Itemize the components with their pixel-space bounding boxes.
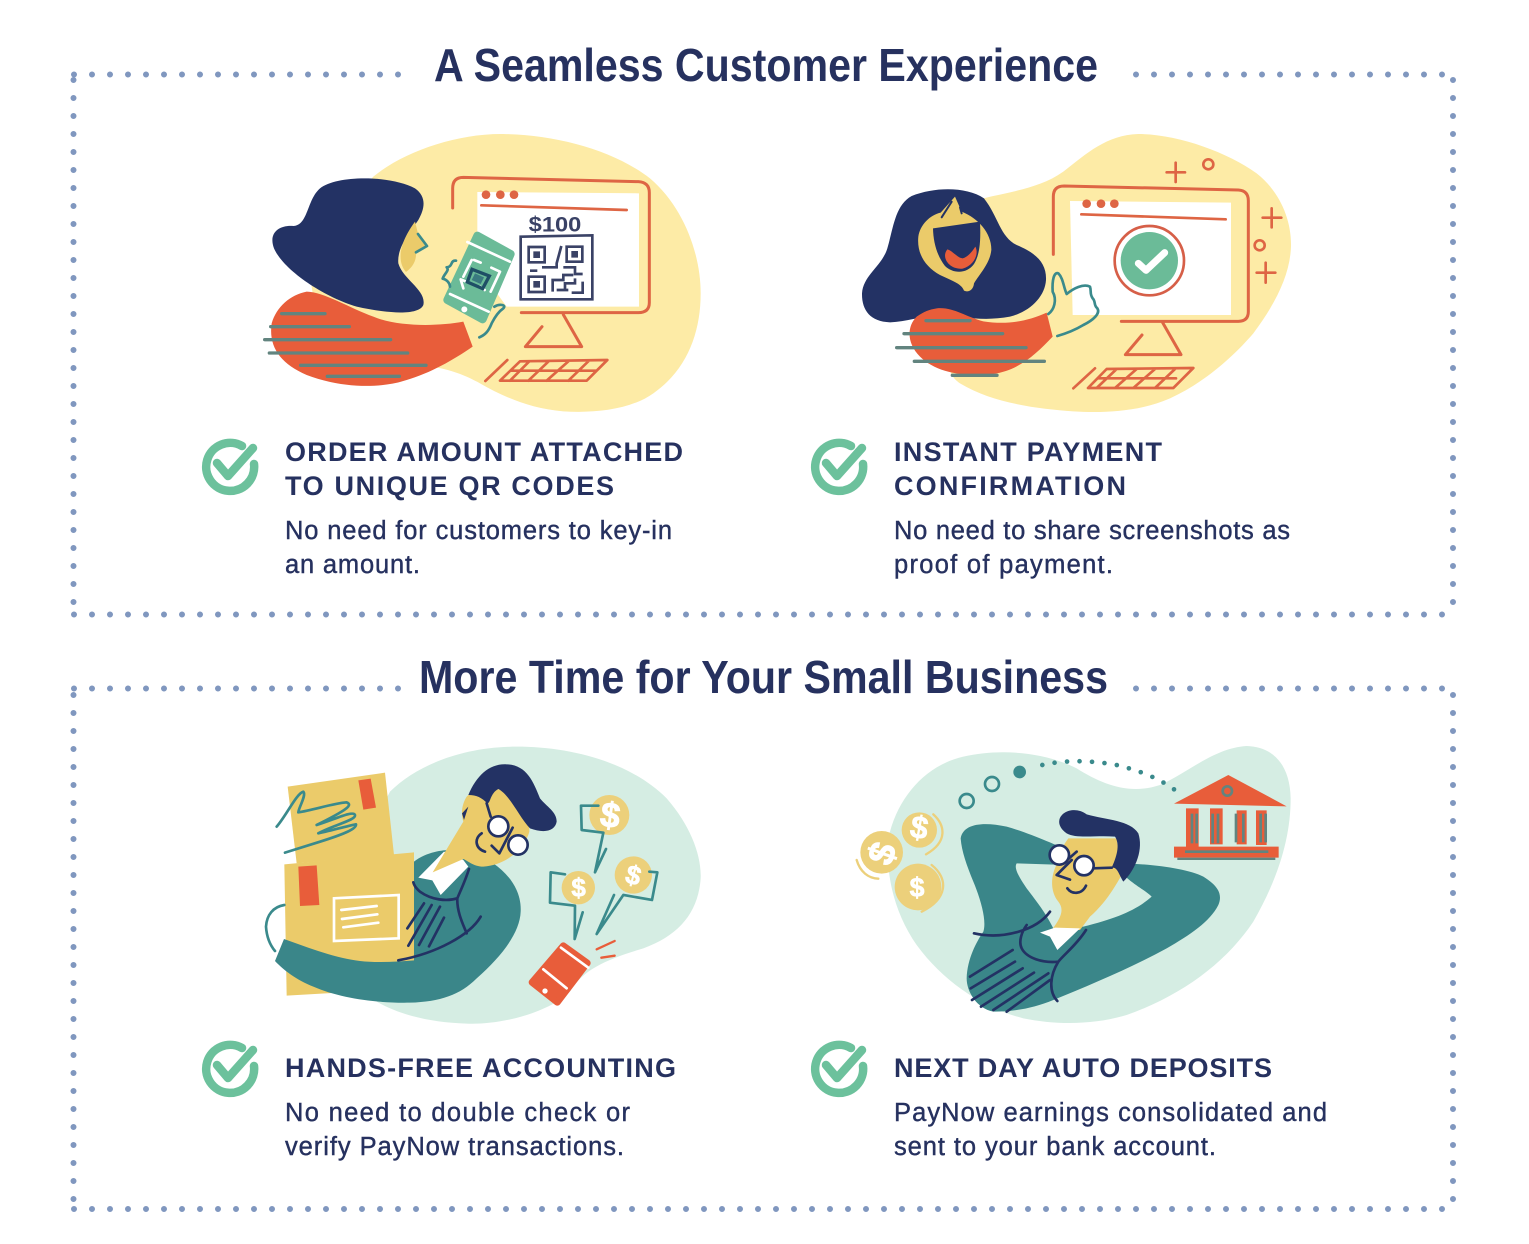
icon: check 3 bbox=[206, 1045, 254, 1093]
text: hands-free accounting: HANDS-FREE ACCOUNTING bbox=[285, 1053, 676, 1083]
coins: $ bbox=[908, 808, 932, 847]
monitor frame bbox=[453, 177, 649, 347]
browser dots bbox=[482, 190, 518, 199]
keyboard bbox=[485, 360, 607, 381]
text: hands-free accounting: verify PayNow transactions. bbox=[285, 1133, 624, 1161]
text: hands-free accounting bbox=[285, 1053, 676, 1161]
stripes bbox=[897, 321, 1044, 375]
text: instant payment: proof of payment. bbox=[894, 551, 1113, 579]
illustration: man carrying boxes: $ bbox=[598, 795, 623, 836]
text: order amount: an amount. bbox=[285, 551, 420, 579]
thumbs up hand bbox=[1048, 273, 1098, 336]
shirt lines bbox=[398, 869, 481, 960]
title: a seamless customer experience: A Seamless Customer Experience bbox=[434, 39, 1098, 91]
neck and face bbox=[1052, 838, 1122, 930]
hair bbox=[462, 764, 557, 831]
hand bbox=[443, 261, 504, 337]
illustration: woman confirming payment bbox=[862, 134, 1291, 412]
collar bbox=[418, 852, 468, 895]
head bbox=[918, 197, 991, 291]
phone QR bbox=[467, 269, 489, 289]
browser dots bbox=[1082, 199, 1119, 208]
keyboard bbox=[1073, 368, 1193, 388]
text: next day auto deposits: sent to your bank account. bbox=[894, 1133, 1216, 1161]
text: instant payment bbox=[894, 437, 1290, 579]
coins bbox=[589, 795, 629, 835]
illustration: woman scanning QR code bbox=[265, 134, 701, 412]
illustration: man carrying boxes: $ bbox=[571, 873, 586, 903]
body lines bbox=[970, 912, 1086, 1012]
sparkles bbox=[1167, 159, 1281, 283]
icon: check 4 bbox=[815, 1045, 863, 1093]
torso and arm bbox=[275, 850, 521, 1003]
phone bbox=[447, 236, 511, 319]
hair bbox=[272, 178, 424, 312]
mint blob bbox=[888, 746, 1291, 1023]
label bbox=[334, 895, 399, 941]
thought bubbles bbox=[960, 777, 999, 808]
glasses bbox=[488, 816, 528, 855]
collar bbox=[1040, 928, 1080, 950]
upper box bbox=[288, 773, 394, 863]
mint blob bbox=[350, 747, 701, 1024]
illustration: man carrying boxes: $ bbox=[622, 859, 645, 892]
panel: a seamless customer experience border bbox=[74, 74, 1453, 614]
monitor frame bbox=[1053, 186, 1248, 355]
arm and torso bbox=[961, 824, 1220, 1012]
hair bbox=[862, 189, 1046, 322]
QR code bbox=[521, 235, 592, 299]
bank bbox=[1174, 775, 1287, 860]
text: order amount: ORDER AMOUNT ATTACHED bbox=[285, 437, 683, 467]
text: instant payment: No need to share screenshots as bbox=[894, 517, 1290, 545]
text: order amount: No need for customers to key-in bbox=[285, 517, 672, 545]
text: hands-free accounting: No need to double check or bbox=[285, 1099, 630, 1127]
monitor screen bbox=[477, 192, 639, 307]
text: instant payment: INSTANT PAYMENT bbox=[894, 437, 1162, 467]
text: order amount bbox=[285, 437, 683, 579]
check badge bbox=[1115, 226, 1184, 295]
coins bbox=[857, 808, 943, 912]
text: next day auto deposits: PayNow earnings consolidated and bbox=[894, 1099, 1327, 1127]
yellow blob bbox=[307, 134, 701, 412]
text: order amount: TO UNIQUE QR CODES bbox=[285, 471, 614, 501]
text: next day auto deposits: NEXT DAY AUTO DEPOSITS bbox=[894, 1053, 1272, 1083]
glasses bbox=[1050, 845, 1094, 875]
tape bbox=[298, 779, 376, 906]
mouth bbox=[945, 247, 977, 269]
panel: more time border bbox=[74, 688, 1453, 1209]
lower box bbox=[284, 852, 414, 996]
neck and face bbox=[433, 788, 529, 872]
phone bbox=[532, 946, 587, 1002]
text: instant payment: CONFIRMATION bbox=[894, 471, 1126, 501]
icon: check 2 bbox=[815, 443, 863, 491]
icon: check 1 bbox=[206, 443, 254, 491]
hand on box bbox=[277, 792, 356, 853]
speech tails bbox=[550, 806, 657, 939]
title: more time: More Time for Your Small Business bbox=[419, 651, 1108, 703]
yellow blob bbox=[949, 134, 1291, 412]
illustration: man carrying boxes bbox=[266, 747, 701, 1024]
face bbox=[401, 222, 427, 272]
illustration: relaxing man with bank bbox=[857, 746, 1291, 1023]
sweater bbox=[910, 308, 1053, 375]
text: next day auto deposits bbox=[894, 1053, 1327, 1161]
amount: $100 bbox=[529, 212, 581, 236]
scarf stripes bbox=[265, 314, 426, 376]
hair bbox=[1059, 810, 1140, 882]
scarf bbox=[271, 292, 473, 386]
coins: $ bbox=[859, 837, 905, 870]
monitor screen bbox=[1070, 201, 1231, 315]
coins: $ bbox=[910, 873, 925, 903]
